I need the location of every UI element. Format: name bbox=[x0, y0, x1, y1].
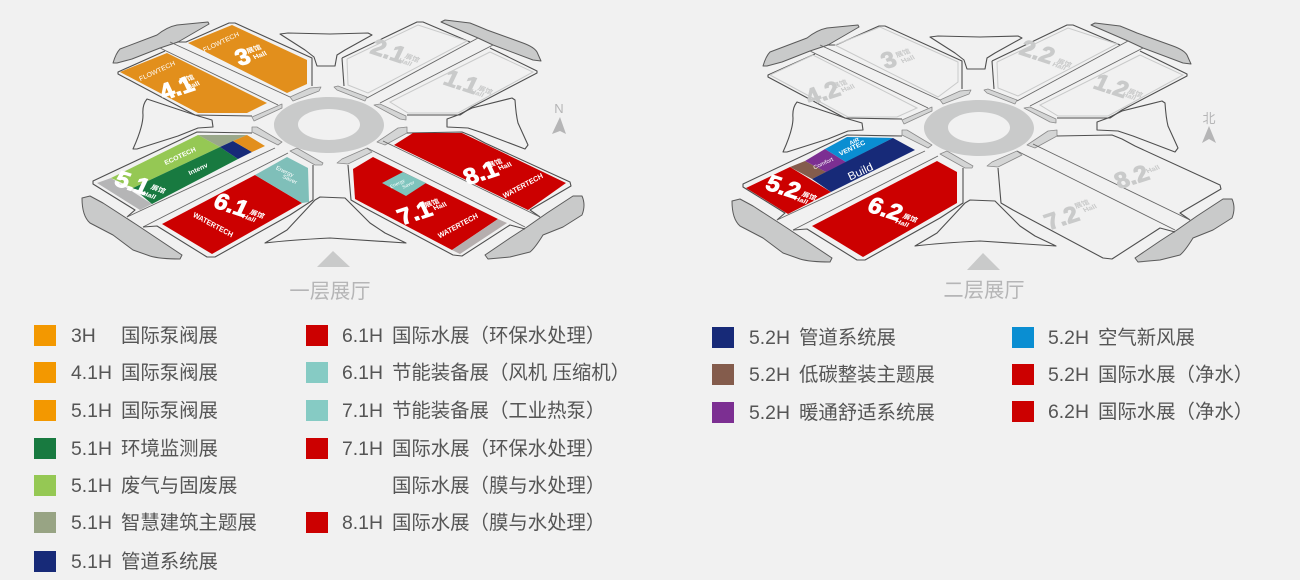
hall 4.2 outline and label: 4.2 bbox=[802, 77, 845, 111]
hall 3 outline and label: 3 bbox=[877, 47, 901, 74]
hall 8.2 label: Hall bbox=[1145, 165, 1161, 175]
legend item: 国际泵阀展 bbox=[121, 400, 218, 422]
hall 5.2: AIR bbox=[849, 137, 861, 147]
legend: column 4 bbox=[1012, 327, 1253, 423]
hall 4.1: FLOWTECH bbox=[138, 60, 177, 83]
hall 1.1 label: Hall bbox=[469, 89, 485, 99]
hall 5.1: Hall bbox=[141, 191, 157, 201]
legend item: 管道系统展 bbox=[121, 551, 218, 573]
hall 2.1 label: 展馆 bbox=[403, 52, 421, 64]
hall 6.2: 展馆 bbox=[901, 212, 919, 224]
north arrow: 北 bbox=[1202, 108, 1216, 127]
legend item: 5.1H bbox=[71, 438, 112, 460]
entrance triangle bbox=[317, 251, 350, 267]
legend item: 5.2H bbox=[749, 402, 790, 424]
north arrow: N bbox=[554, 101, 564, 116]
hall 6.2 bbox=[812, 161, 957, 257]
legend item bbox=[34, 362, 218, 384]
legend item: 废气与固废展 bbox=[121, 475, 237, 497]
hall 3: Hall bbox=[252, 51, 268, 61]
hall 1.2 label: 1.2 bbox=[1089, 70, 1132, 104]
hall 6.1: Saver bbox=[281, 174, 298, 186]
hall 7.1: Hall bbox=[432, 202, 448, 212]
hall 5.2: Build bbox=[846, 161, 875, 183]
hall 3 bbox=[188, 25, 307, 93]
hall 2.2 label bbox=[1015, 36, 1073, 72]
hall 4.1: 展馆 bbox=[178, 73, 196, 85]
hall 8.1: 展馆 bbox=[486, 157, 504, 169]
hall 2.2 label: Hall bbox=[1051, 62, 1067, 72]
hall 4.2 outline and label: 展馆 bbox=[831, 78, 849, 90]
hall 1.2 label: 展馆 bbox=[1126, 87, 1144, 99]
hall 6.1: Hall bbox=[241, 214, 257, 224]
legend item bbox=[1012, 364, 1253, 386]
floor 1 plan bbox=[82, 20, 584, 267]
hall 3 outline and label: 展馆 bbox=[894, 47, 912, 59]
legend item: 国际水展（净水） bbox=[1098, 364, 1253, 386]
hall 5.2: Hall bbox=[793, 196, 809, 206]
hall 4.1: Hall bbox=[185, 81, 201, 91]
legend item bbox=[1012, 327, 1195, 349]
hall 8.1: WATERTECH bbox=[501, 171, 544, 200]
legend item: 5.2H bbox=[749, 327, 790, 349]
hall 7.1: 7.1 bbox=[394, 197, 437, 231]
hall 7.2 label: 7.2 bbox=[1041, 202, 1084, 236]
legend item: 5.1H bbox=[71, 400, 112, 422]
hall 7.1 bbox=[353, 157, 507, 254]
legend item bbox=[1012, 401, 1253, 423]
legend item bbox=[34, 325, 218, 347]
hall 2.2 label: 展馆 bbox=[1055, 57, 1073, 69]
legend item bbox=[712, 364, 935, 386]
legend item bbox=[34, 551, 218, 573]
legend item: 5.1H bbox=[71, 475, 112, 497]
legend item: 6.1H bbox=[342, 362, 383, 384]
hall 8.1 bbox=[394, 133, 566, 210]
hall 5.1: ECOTECH bbox=[164, 146, 197, 167]
hall 8.2 label: 8.2 bbox=[1111, 161, 1154, 195]
legend item: 4.1H bbox=[71, 362, 112, 384]
hall 5.2 bbox=[746, 137, 915, 214]
legend item: 7.1H bbox=[342, 438, 383, 460]
hall 5.1 bbox=[97, 135, 265, 210]
hall 1.1 label: 1.1 bbox=[439, 66, 482, 100]
hall 5.2: 5.2 bbox=[761, 171, 804, 205]
legend item: 5.2H bbox=[1048, 364, 1089, 386]
hall 7.2 label bbox=[1041, 198, 1098, 236]
hall 6.1: 6.1 bbox=[209, 189, 252, 223]
hall 5.1: 5.1 bbox=[110, 167, 153, 201]
legend item: 节能装备展（工业热泵） bbox=[392, 400, 605, 422]
legend item: 智慧建筑主题展 bbox=[121, 512, 257, 534]
legend item: 5.1H bbox=[71, 512, 112, 534]
legend item: 低碳整装主题展 bbox=[799, 364, 935, 386]
hall 7.2 label: 展馆 bbox=[1073, 198, 1091, 210]
hall 3 outline and label bbox=[835, 27, 958, 97]
legend: column 1 bbox=[34, 325, 257, 573]
hall 3 outline and label: Hall bbox=[900, 55, 916, 65]
hall 2.1 label: Hall bbox=[397, 58, 413, 68]
hall 6.1: WATERTECH bbox=[192, 210, 235, 239]
caption: floor 1: 一层展厅 bbox=[289, 281, 371, 303]
legend item: 国际水展（环保水处理） bbox=[392, 325, 605, 347]
hall 7.1: WATERTECH bbox=[436, 211, 479, 240]
hall 5.2: VENTEC bbox=[838, 140, 867, 158]
hall 2.1 label: 2.1 bbox=[366, 35, 409, 69]
legend item: 国际泵阀展 bbox=[121, 362, 218, 384]
hall 5.1: 展馆 bbox=[149, 183, 167, 195]
hall 5.2: Comfort bbox=[813, 157, 835, 171]
legend item: 6.1H bbox=[342, 325, 383, 347]
hall 7.1: Energy bbox=[389, 178, 406, 190]
hall 8.1: 8.1 bbox=[460, 157, 503, 191]
hall 6.2: Hall bbox=[894, 219, 910, 229]
north arrow bbox=[1202, 108, 1216, 143]
hall 4.2 outline and label: Hall bbox=[840, 84, 856, 94]
hall 6.1: Energy bbox=[275, 165, 294, 179]
north arrow bbox=[552, 101, 566, 134]
hall 7.1: 展馆 bbox=[423, 197, 441, 209]
legend item: 国际水展（膜与水处理） bbox=[392, 475, 605, 497]
hall 3: 展馆 bbox=[245, 43, 263, 55]
legend item: 5.2H bbox=[1048, 327, 1089, 349]
hall 2.2 label: 2.2 bbox=[1015, 36, 1058, 70]
legend item: 国际泵阀展 bbox=[121, 325, 218, 347]
hall 5.1: Intenv bbox=[188, 162, 209, 177]
hall 3: 3 bbox=[231, 44, 255, 71]
legend item: 管道系统展 bbox=[799, 327, 896, 349]
hall 7.1: Saver bbox=[401, 180, 416, 191]
legend item bbox=[712, 402, 935, 424]
hall 6.1: 展馆 bbox=[248, 208, 266, 220]
legend item bbox=[34, 512, 257, 534]
hall 8.1: Hall bbox=[497, 162, 513, 172]
hall 1.1 label: 展馆 bbox=[476, 84, 494, 96]
caption: floor 2: 二层展厅 bbox=[943, 280, 1025, 302]
legend item bbox=[34, 475, 237, 497]
legend item: 5.2H bbox=[749, 364, 790, 386]
hall 6.2: 6.2 bbox=[863, 193, 906, 227]
legend item: 国际水展（环保水处理） bbox=[392, 438, 605, 460]
legend: column 3 bbox=[712, 327, 935, 424]
hall 4.2 outline and label bbox=[770, 55, 917, 117]
legend item: 暖通舒适系统展 bbox=[799, 402, 935, 424]
hall 3: FLOWTECH bbox=[202, 31, 241, 54]
hall 4.1: 4.1 bbox=[156, 72, 199, 106]
hall 4.1 bbox=[120, 53, 267, 113]
legend item: 8.1H bbox=[342, 512, 383, 534]
legend item: 空气新风展 bbox=[1098, 327, 1195, 349]
legend item: 3H bbox=[71, 325, 96, 347]
legend item: 节能装备展（风机 压缩机） bbox=[392, 362, 630, 384]
legend item bbox=[712, 327, 896, 349]
legend item: 环境监测展 bbox=[121, 438, 218, 460]
legend item bbox=[34, 438, 218, 460]
hall 1.2 label: Hall bbox=[1121, 92, 1137, 102]
legend item: 5.1H bbox=[71, 551, 112, 573]
legend item bbox=[34, 400, 218, 422]
legend item: 7.1H bbox=[342, 400, 383, 422]
hall 6.1 bbox=[162, 157, 309, 254]
entrance triangle bbox=[967, 253, 1000, 270]
legend: column 2 bbox=[306, 325, 630, 534]
legend item: 国际水展（净水） bbox=[1098, 401, 1253, 423]
hall 7.2 label: Hall bbox=[1082, 204, 1098, 214]
legend item: 国际水展（膜与水处理） bbox=[392, 512, 605, 534]
floor 2 plan bbox=[732, 23, 1234, 270]
legend item: 6.2H bbox=[1048, 401, 1089, 423]
hall 5.2: 展馆 bbox=[800, 190, 818, 202]
